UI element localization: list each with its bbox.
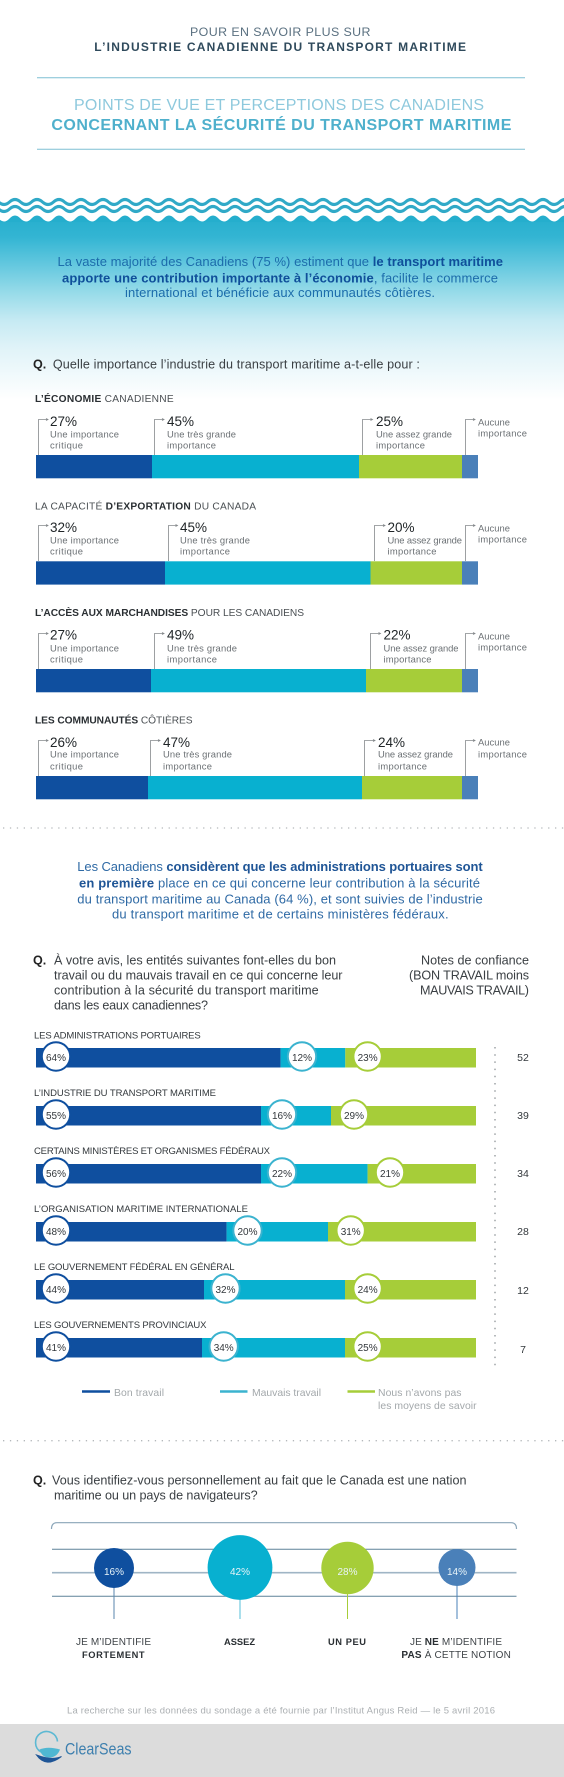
chart: capacité d'exportation: 45% (180, 520, 207, 535)
bar row: administrations portuaires: LES ADMINISTRATIONS PORTUAIRES (34, 1030, 201, 1042)
chart: accès aux marchandises: 22% (384, 628, 411, 642)
chart: communautés côtières: Une importance (50, 748, 119, 760)
question 2 (33, 952, 342, 1012)
bar row: ministères et organismes fédéraux (34, 1146, 529, 1187)
bar row: organisation maritime internationale: 48% (46, 1227, 66, 1238)
chart: accès aux marchandises: 49% (167, 628, 194, 642)
question 3: Q. (33, 1474, 46, 1488)
bar row: ministères et organismes fédéraux: 21% (380, 1169, 400, 1180)
chart: l'économie canadienne: Une très grande (167, 428, 236, 440)
bubble labels: JE M’IDENTIFIE (76, 1637, 151, 1648)
bubble: 16% fortement (94, 1548, 134, 1619)
intro text: apporte une contribution importante à l’économie, facilite le commerce (62, 270, 498, 286)
chart: communautés côtières: importance (478, 748, 527, 760)
bar row: administrations portuaires: 12% (292, 1053, 312, 1064)
bar row: administrations portuaires: 23% (358, 1053, 378, 1064)
bar row: gouvernements provinciaux: 41% (46, 1343, 66, 1354)
main title (37, 78, 525, 149)
bar row: gouvernement fédéral: 32% (215, 1285, 236, 1296)
legend: Bon travail (114, 1388, 164, 1399)
chart: accès aux marchandises: Une très grande (167, 642, 237, 654)
header: kicker title: POUR EN SAVOIR PLUS SUR (190, 25, 371, 39)
bar row: ministères et organismes fédéraux: 56% (46, 1169, 66, 1180)
legend: Nous n’avons pas (378, 1388, 462, 1399)
chart: accès aux marchandises: 27% (50, 628, 77, 642)
bar row: gouvernements provinciaux: 34% (214, 1343, 234, 1354)
bubble labels: UN PEU (328, 1637, 366, 1647)
intro text: La vaste majorité des Canadiens (75 %) estiment que le transport maritime (58, 254, 503, 269)
chart: accès aux marchandises: Une importance (50, 642, 119, 654)
bubble: 42% assez (208, 1535, 272, 1619)
bar row: ministères et organismes fédéraux: CERTAINS MINISTÈRES ET ORGANISMES FÉDÉRAUX (34, 1146, 271, 1157)
header: kicker title (94, 25, 466, 54)
chart: communautés côtières: importance (163, 760, 212, 772)
bubble: 14% pas: 14% (447, 1567, 467, 1578)
bar row: organisation maritime internationale: 28 (517, 1226, 529, 1238)
chart: communautés côtières: importance (378, 760, 427, 772)
chart: communautés côtières: 24% (378, 735, 405, 750)
bar row: industrie du transport maritime (34, 1088, 529, 1129)
question 3: Vous identifiez-vous personnellement au fait que le Canada est une nation (52, 1474, 466, 1488)
bar row: industrie du transport maritime: 16% (272, 1111, 292, 1122)
chart: accès aux marchandises: importance (167, 654, 217, 664)
section 2 intro text: du transport maritime et de certains ministères fédéraux. (112, 906, 449, 922)
chart: communautés côtières: Aucune (478, 736, 510, 748)
chart: accès aux marchandises: importance (478, 642, 527, 652)
question 2: Q. (33, 954, 46, 968)
bar row: gouvernement fédéral: 24% (358, 1285, 378, 1296)
bubble: 42% assez: 42% (230, 1567, 250, 1578)
confidence score heading: (BON TRAVAIL moins (409, 968, 529, 982)
bubble labels: PAS À CETTE NOTION (401, 1648, 511, 1661)
bar row: gouvernement fédéral: 44% (46, 1285, 66, 1296)
legend: les moyens de savoir (378, 1401, 477, 1412)
chart: l'économie canadienne: Aucune (478, 416, 510, 428)
question 1: Quelle importance l’industrie du transport maritime a-t-elle pour : (53, 358, 420, 372)
confidence score heading: Notes de confiance (421, 954, 529, 968)
bubble: 16% fortement: 16% (104, 1567, 124, 1578)
chart: capacité d'exportation: Aucune (478, 522, 510, 534)
bar row: industrie du transport maritime: L’INDUSTRIE DU TRANSPORT MARITIME (34, 1088, 216, 1099)
chart: l'économie canadienne: L’ÉCONOMIE CANADIENNE (35, 392, 174, 405)
bubble: 14% pas (438, 1549, 476, 1619)
bar row: organisation maritime internationale: 31% (341, 1227, 361, 1238)
chart: communautés côtières: LES COMMUNAUTÉS CÔTIÈRES (35, 714, 193, 726)
section 2 intro text: du transport maritime au Canada (64 %), et sont suivies de l’industrie (77, 892, 483, 906)
intro text: international et bénéficie aux communautés côtières. (125, 285, 435, 300)
logo: Clear Seas (36, 1732, 131, 1762)
chart: l'économie canadienne: importance (376, 440, 425, 450)
chart: communautés côtières: 26% (50, 735, 77, 750)
chart: accès aux marchandises: L’ACCÈS AUX MARCHANDISES POUR LES CANADIENS (35, 606, 304, 619)
chart: capacité d'exportation: 20% (388, 520, 415, 535)
confidence score heading: MAUVAIS TRAVAIL) (420, 984, 529, 998)
bar row: gouvernement fédéral: 12 (517, 1285, 529, 1297)
chart: accès aux marchandises: Une assez grande (384, 642, 458, 654)
question 1: Q. (33, 358, 46, 372)
footer band (0, 1724, 564, 1777)
bar row: gouvernements provinciaux: 7 (520, 1344, 526, 1356)
chart: l'économie canadienne: importance (478, 428, 527, 438)
bar row: gouvernement fédéral (34, 1262, 529, 1303)
bubble chart (52, 1523, 516, 1619)
question 3: maritime ou un pays de navigateurs? (54, 1488, 258, 1502)
bar row: administrations portuaires: 64% (46, 1053, 66, 1064)
bar row: industrie du transport maritime: 29% (344, 1111, 364, 1122)
chart: l'économie canadienne: 27% (50, 414, 77, 429)
logo: Clear Seas: ClearSeas (65, 1740, 132, 1758)
bar row: administrations portuaires (34, 1030, 529, 1071)
chart: l'économie canadienne: 25% (376, 414, 403, 429)
bar row: industrie du transport maritime: 55% (46, 1111, 66, 1122)
chart: accès aux marchandises: critique (50, 654, 83, 664)
legend: Mauvais travail (252, 1388, 321, 1399)
chart: communautés côtières (35, 714, 527, 799)
intro text (58, 254, 503, 300)
chart: l'économie canadienne: Une assez grande (376, 428, 452, 440)
bubble labels: ASSEZ (224, 1637, 255, 1647)
bar row: organisation maritime internationale: 20% (237, 1227, 258, 1238)
bubble labels (76, 1637, 511, 1661)
chart: l'économie canadienne: importance (167, 440, 216, 450)
bar row: administrations portuaires: 52 (517, 1052, 529, 1064)
chart: capacité d'exportation: importance (180, 546, 230, 556)
bar row: organisation maritime internationale: L’ORGANISATION MARITIME INTERNATIONALE (34, 1204, 248, 1215)
chart: capacité d'exportation: Une assez grande (388, 534, 462, 546)
chart: accès aux marchandises: Aucune (478, 630, 510, 642)
chart: communautés côtières: 47% (163, 735, 190, 750)
chart: l'économie canadienne: 45% (167, 414, 194, 429)
question 3 (33, 1474, 466, 1502)
main title: POINTS DE VUE ET PERCEPTIONS DES CANADIENS (74, 97, 484, 114)
chart: capacité d'exportation (35, 500, 527, 585)
section 2 intro text: en première place en ce qui concerne leur contribution à la sécurité (79, 876, 480, 890)
bubble: 28% un peu: 28% (337, 1567, 358, 1578)
chart: accès aux marchandises (35, 606, 527, 692)
bubble labels: FORTEMENT (82, 1650, 145, 1660)
chart: capacité d'exportation: importance (478, 534, 527, 544)
bubble: 28% un peu (321, 1542, 374, 1619)
chart: capacité d'exportation: LA CAPACITÉ D’EXPORTATION DU CANADA (35, 500, 256, 512)
chart: communautés côtières: critique (50, 760, 83, 772)
question 2: contribution à la sécurité du transport maritime (54, 984, 319, 998)
header: kicker title: L’INDUSTRIE CANADIENNE DU TRANSPORT MARITIME (94, 40, 466, 54)
source note: La recherche sur les données du sondage a été fournie par l’Institut Angus Reid — le 5 avril 2016 (67, 1706, 495, 1716)
chart: capacité d'exportation: critique (50, 546, 83, 556)
chart: capacité d'exportation: Une très grande (180, 534, 250, 546)
question 2: À votre avis, les entités suivantes font-elles du bon (54, 952, 336, 968)
wave band (0, 196, 564, 400)
chart: l'économie canadienne: Une importance (50, 428, 119, 440)
bar row: ministères et organismes fédéraux: 22% (272, 1169, 292, 1180)
bar row: gouvernement fédéral: LE GOUVERNEMENT FÉDÉRAL EN GÉNÉRAL (34, 1262, 234, 1273)
legend (82, 1388, 477, 1412)
bar row: ministères et organismes fédéraux: 34 (517, 1168, 529, 1180)
main title: CONCERNANT LA SÉCURITÉ DU TRANSPORT MARITIME (51, 115, 512, 134)
chart: capacité d'exportation: 32% (50, 520, 77, 535)
chart: capacité d'exportation: Une importance (50, 534, 119, 546)
bar row: gouvernements provinciaux: LES GOUVERNEMENTS PROVINCIAUX (34, 1320, 207, 1331)
bar row: gouvernements provinciaux: 25% (358, 1343, 378, 1354)
chart: l'économie canadienne: critique (50, 440, 83, 450)
question 2: dans les eaux canadiennes? (54, 998, 208, 1012)
chart: l'économie canadienne (35, 392, 527, 478)
chart: communautés côtières: Une assez grande (378, 748, 453, 760)
bubble labels: JE NE M’IDENTIFIE (410, 1637, 502, 1648)
section 2 intro text (77, 859, 483, 922)
bar row: organisation maritime internationale (34, 1204, 529, 1245)
chart: capacité d'exportation: importance (388, 546, 436, 556)
bar row: industrie du transport maritime: 39 (517, 1110, 529, 1122)
section 2 intro text: Les Canadiens considèrent que les administrations portuaires sont (77, 859, 483, 874)
chart: accès aux marchandises: importance (384, 654, 432, 664)
bar row: gouvernements provinciaux (34, 1320, 526, 1361)
question 2: travail ou du mauvais travail en ce qui concerne leur (54, 968, 342, 982)
chart: communautés côtières: Une très grande (163, 748, 232, 760)
confidence score heading (409, 954, 529, 998)
